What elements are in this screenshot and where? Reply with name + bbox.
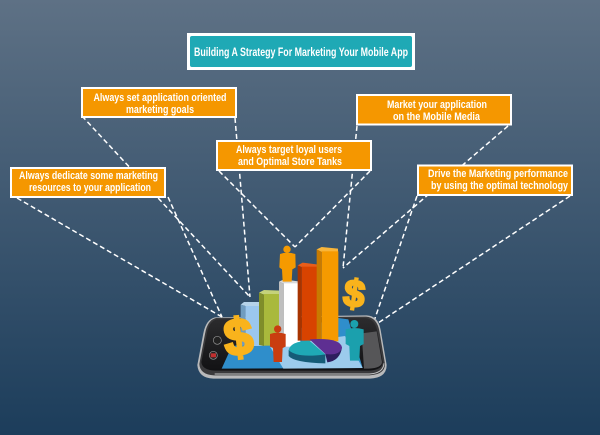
callout: dedicate resources: Always dedicate some marketing (19, 170, 158, 182)
bar: light blue (241, 302, 263, 346)
callout: mobile media: on the Mobile Media (393, 111, 481, 123)
bar: red (298, 263, 319, 341)
title: Building A Strategy For Marketing Your Mobile App (194, 47, 408, 59)
pie chart (289, 339, 342, 363)
figure: teal person (346, 320, 364, 361)
dashed connector lines (17, 116, 570, 327)
callout: mobile media (356, 94, 512, 126)
callout: optimal technology: by using the optimal technology (431, 180, 569, 192)
callout: loyal users (216, 140, 372, 171)
title (187, 33, 415, 70)
bar chart (241, 247, 338, 347)
icon: dollar sign large: $ (221, 307, 256, 367)
figure: red person (270, 325, 286, 362)
callout: loyal users: and Optimal Store Tanks (238, 156, 342, 168)
callout: application goals (81, 87, 237, 118)
callout: optimal technology: Drive the Marketing performance (428, 168, 568, 180)
icon: smartphone (197, 315, 387, 379)
icon: phone buttons (209, 336, 221, 359)
figure: orange person (279, 246, 296, 282)
callout: application goals: marketing goals (126, 104, 194, 116)
callout: dedicate resources: resources to your application (29, 182, 151, 194)
callout: optimal technology (417, 164, 573, 196)
callout: dedicate resources (10, 167, 166, 198)
phone screen (222, 318, 363, 369)
bar: white (279, 279, 300, 347)
callout: loyal users: Always target loyal users (236, 144, 342, 156)
bar: green (259, 290, 281, 346)
callout: mobile media: Market your application (387, 99, 487, 111)
bar: orange (317, 247, 338, 341)
callout: application goals: Always set application oriented (94, 92, 226, 104)
icon: dollar sign small: $ (341, 272, 368, 317)
phone with bar chart illustration (197, 246, 387, 379)
